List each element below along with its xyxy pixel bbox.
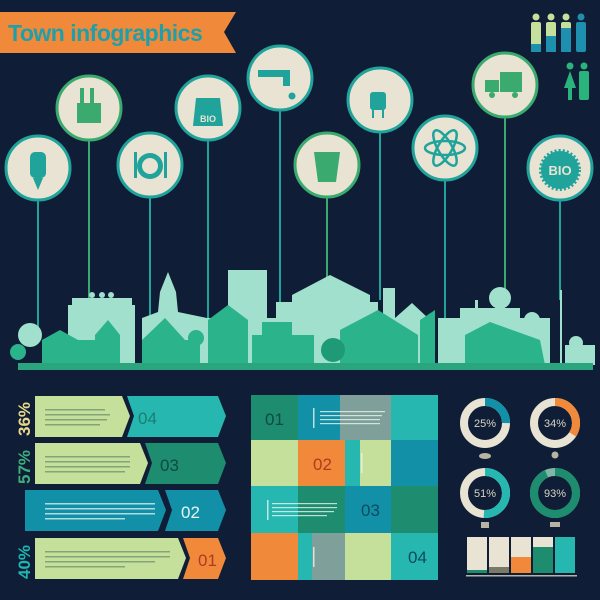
row 01: 01 — [198, 551, 217, 570]
donut charts: 25% — [474, 418, 496, 430]
icon: bin — [295, 133, 359, 197]
donut charts — [464, 402, 576, 528]
icon: bio bag: BIO — [200, 114, 216, 124]
row 03: 03 — [160, 456, 179, 475]
placeholder lines — [45, 409, 170, 568]
row 02 — [25, 490, 226, 531]
row 02: 02 — [181, 503, 200, 522]
donut charts: 34% — [544, 418, 566, 430]
icon: bio badge: BIO — [548, 163, 572, 178]
title banner — [0, 12, 236, 53]
mosaic panel: 01 — [265, 410, 284, 429]
arrow rows — [25, 396, 226, 579]
percentages: 57% — [15, 450, 34, 484]
percentages: 40% — [15, 545, 34, 579]
row 03 — [35, 443, 226, 484]
mosaic panel: 04 — [408, 548, 427, 567]
icon: plate — [118, 133, 182, 197]
icon circles — [6, 46, 592, 200]
percentages: 36% — [15, 402, 34, 436]
people icons — [531, 14, 589, 100]
icon: plug — [348, 68, 412, 132]
icon: truck — [473, 53, 537, 117]
stick lines — [38, 110, 560, 330]
donut charts: 93% — [544, 488, 566, 500]
mosaic panel — [251, 395, 438, 580]
mosaic panel: 02 — [313, 455, 332, 474]
icon: factory — [57, 76, 121, 140]
icon: bio badge — [528, 136, 592, 200]
percentages — [15, 402, 34, 579]
icon: bio bag — [176, 76, 240, 140]
icon: bulb — [6, 136, 70, 200]
title banner: Town infographics — [8, 20, 202, 46]
donut charts: 51% — [474, 488, 496, 500]
icon: atom — [413, 116, 477, 180]
skyline — [10, 270, 595, 370]
row 04 — [35, 396, 226, 437]
icon: tap — [248, 46, 312, 110]
mosaic panel: 03 — [361, 501, 380, 520]
row 04: 04 — [138, 409, 157, 428]
row 01 — [35, 538, 226, 579]
bar chart — [466, 537, 577, 576]
